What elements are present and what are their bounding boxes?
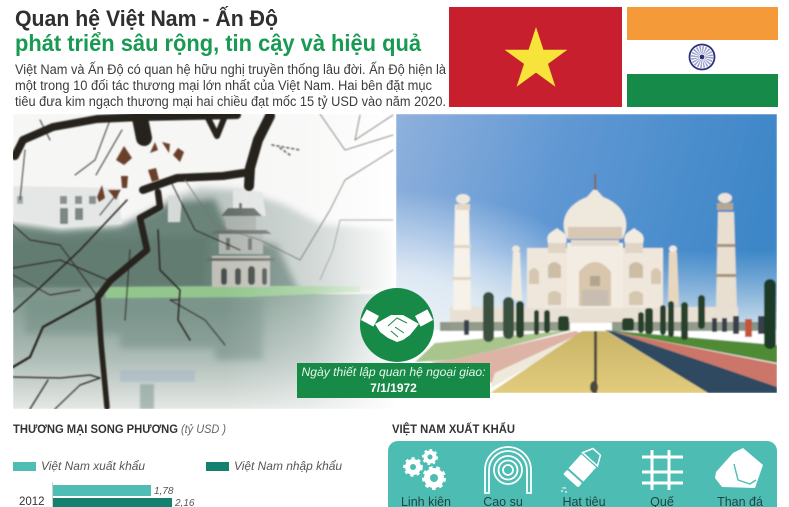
export labels [401, 495, 763, 507]
main dome [564, 174, 626, 246]
heading: bilateral trade: THƯƠNG MẠI SONG PHƯƠNG [13, 422, 178, 436]
far haze of trees [0, 188, 393, 292]
icon: pepper shaker [561, 445, 604, 493]
small domes [547, 228, 644, 253]
plinth [450, 307, 738, 323]
fade to white [225, 114, 395, 409]
intro text block: một trong 10 đối tác thương mại lớn nhất của Việt Nam. Hai bên đặt mục [15, 78, 432, 93]
bar chart: 1,78 [154, 486, 174, 497]
cypress trees [483, 279, 776, 349]
icon: gears [405, 450, 444, 488]
bar chart [19, 482, 195, 507]
visitors [464, 316, 764, 337]
intro text block [15, 62, 447, 109]
leaves [97, 142, 184, 202]
main building [527, 243, 663, 308]
legend [13, 459, 342, 473]
icon: Vietnam flag [449, 7, 622, 107]
callout: diplomatic relations date [297, 363, 490, 398]
building [13, 186, 266, 228]
grounds [396, 322, 777, 393]
icon: handshake badge [360, 288, 434, 362]
legend: Việt Nam xuất khẩu [41, 459, 145, 473]
icon: cinnamon sticks grid [642, 450, 683, 490]
title: phát triển sâu rộng, tin cậy và hiệu quả [15, 30, 421, 56]
icon: rubber hose [485, 447, 531, 493]
branches [13, 114, 393, 409]
legend: Việt Nam nhập khẩu [234, 459, 342, 473]
callout: diplomatic relations date: 7/1/1972 [370, 381, 417, 395]
photo: Hoan Kiem lake Hanoi [0, 114, 395, 409]
minarets [452, 193, 737, 310]
grass bank [104, 286, 360, 298]
heading: bilateral trade: (tỷ USD ) [181, 422, 226, 436]
intro text block: Việt Nam và Ấn Độ có quan hệ hữu nghị truyền thống lâu đời. Ấn Độ hiện là [15, 62, 447, 77]
heading: Vietnam exports: VIỆT NAM XUẤT KHẨU [392, 421, 515, 436]
water [13, 294, 393, 409]
icon: India flag [627, 7, 778, 107]
title [15, 6, 421, 56]
callout: diplomatic relations date: Ngày thiết lập quan hệ ngoại giao: [302, 365, 486, 379]
icon: coal [715, 448, 763, 488]
panel: Vietnam exports [388, 441, 777, 507]
pagoda [207, 203, 275, 287]
title: Quan hệ Việt Nam - Ấn Độ [15, 6, 278, 31]
photo: Taj Mahal [396, 114, 777, 393]
intro text block: tiêu đưa kim ngạch thương mại hai chiều đạt mốc 15 tỷ USD vào năm 2020. [15, 94, 446, 109]
